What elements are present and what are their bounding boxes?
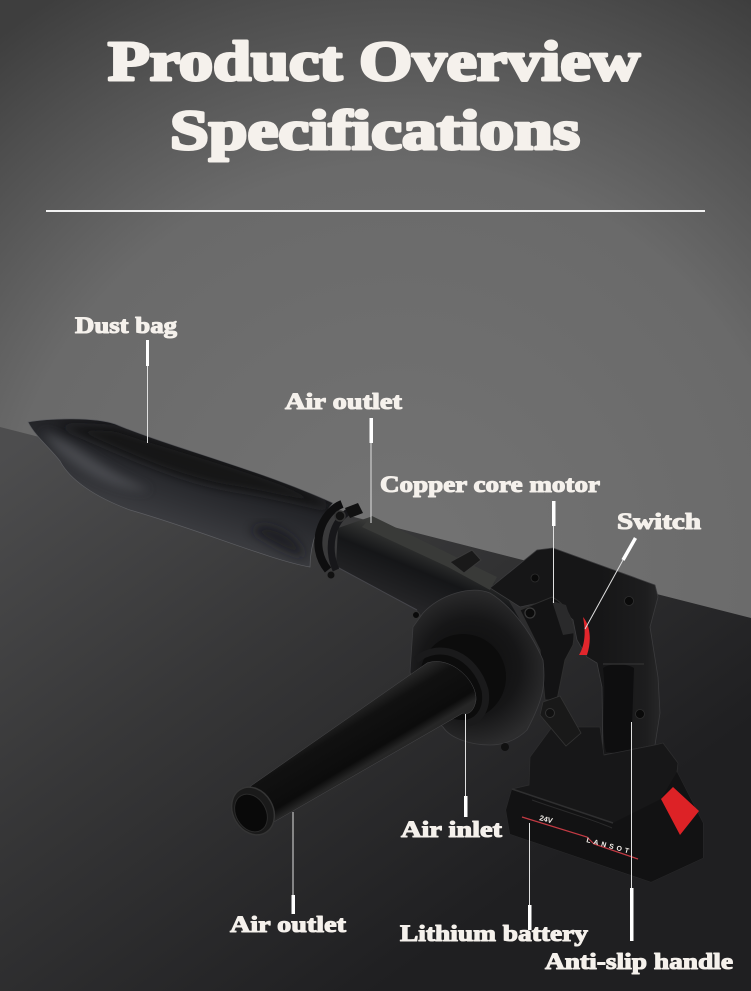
fan housing [410,590,581,751]
tube clip [450,550,481,573]
battery release button [661,787,699,835]
battery label: 24V [538,813,554,825]
label: Switch [585,509,701,629]
motor vents and band [520,597,575,700]
background: lower dark diagonal panel [0,427,751,991]
label: Air outlet top: Air outlet [285,389,402,414]
label: Anti-slip handle [545,722,733,974]
label: Anti-slip handle: Anti-slip handle [545,949,733,974]
air inlet nozzle [223,651,486,843]
blower air outlet tube [336,517,520,640]
title: Product Overview [108,31,641,93]
label: Copper core motor [380,472,600,603]
label: Air outlet top [285,389,402,523]
red switch [579,617,590,655]
label: Switch: Switch [617,509,701,534]
label: Copper core motor: Copper core motor [380,472,600,497]
label: Air inlet [401,714,502,842]
grip texture panel [603,664,634,755]
label: Lithium battery [400,823,589,946]
product: cordless blower with dust bag [28,419,703,882]
label: Lithium battery: Lithium battery [400,921,589,946]
label: Dust bag: Dust bag [75,313,178,338]
title: Specifications [170,100,580,162]
label: Dust bag [75,313,178,443]
handle screws [531,574,644,718]
title [108,31,641,162]
title divider [46,210,705,212]
label: Air outlet bottom [230,812,346,937]
dust bag [28,419,335,567]
battery: LANSOT [585,837,632,856]
handle body and grip [490,548,660,755]
label: Air outlet bottom: Air outlet [230,912,346,937]
tube clamp ring [318,503,363,578]
label: Air inlet: Air inlet [401,817,502,842]
battery [506,727,703,882]
